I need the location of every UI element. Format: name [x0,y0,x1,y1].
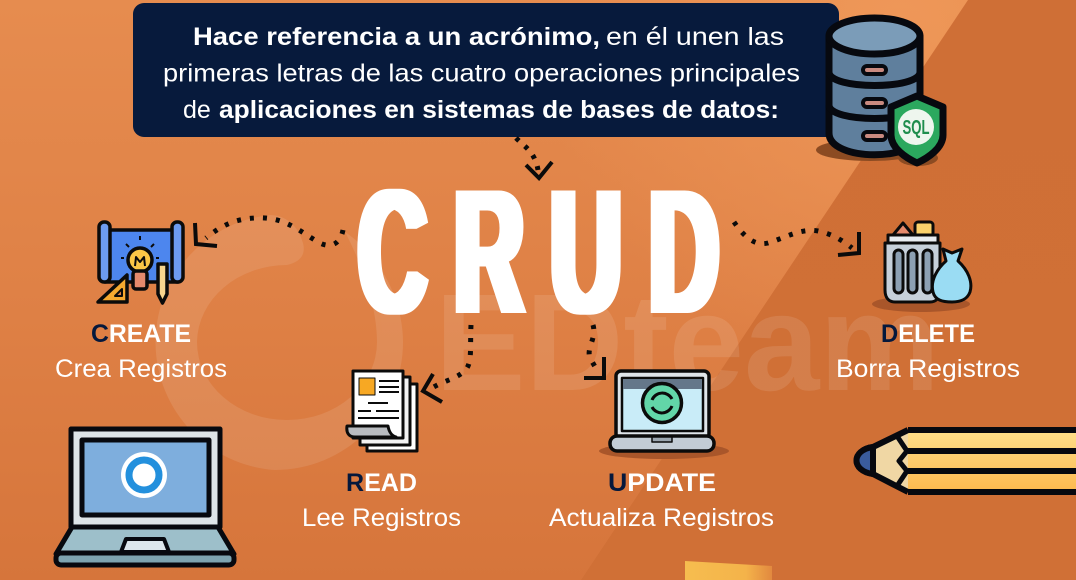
icon: large laptop with logo [56,429,234,565]
label: CREATE: CREATE [91,320,191,348]
title: CRUD: R [454,154,524,352]
icon: database with SQL shield [816,18,943,166]
callout text line 2: primeras letras de las cuatro operaciones principales [163,60,800,88]
description: Borra Registros: Borra Registros [836,355,1020,383]
arrow: CRUD to Create [195,218,343,246]
watermark: EDteam logo [156,215,940,470]
icon: documents [347,371,417,451]
label: CREATE [55,320,227,383]
description: Crea Registros: Crea Registros [55,355,227,383]
watermark: EDteam logo: EDteam [435,266,940,420]
icon: large pencil [856,430,1076,492]
label: DELETE [836,320,1020,383]
label: UPDATE: UPDATE [608,469,716,497]
label: READ: READ [346,469,417,497]
icon: blueprint with bulb [98,222,183,303]
title: CRUD: U [550,152,622,351]
arrow: CRUD to Update [584,325,604,378]
label: READ [302,469,461,532]
title: CRUD: C [358,153,427,352]
description: Lee Registros: Lee Registros [302,504,461,532]
arrow: callout to CRUD [516,138,552,178]
callout text line 3: aplicaciones en sistemas de bases de datos: [219,96,779,124]
arrow: CRUD to Delete [734,222,859,255]
callout text line 1: Hace referencia a un acrónimo, [193,23,600,51]
callout: definition box [133,3,839,137]
callout text line 3: de [183,96,211,124]
title: CRUD [358,152,719,352]
icon: laptop with refresh [599,371,729,459]
SQL label: SQL [902,117,930,139]
arrow: CRUD to Read [423,325,471,402]
callout text line 1: en él unen las [606,23,784,51]
description: Actualiza Registros: Actualiza Registros [549,504,774,532]
title: CRUD: D [649,154,719,352]
icon: trash can and bag [872,222,971,312]
label: UPDATE [549,469,774,532]
label: DELETE: DELETE [881,320,975,348]
